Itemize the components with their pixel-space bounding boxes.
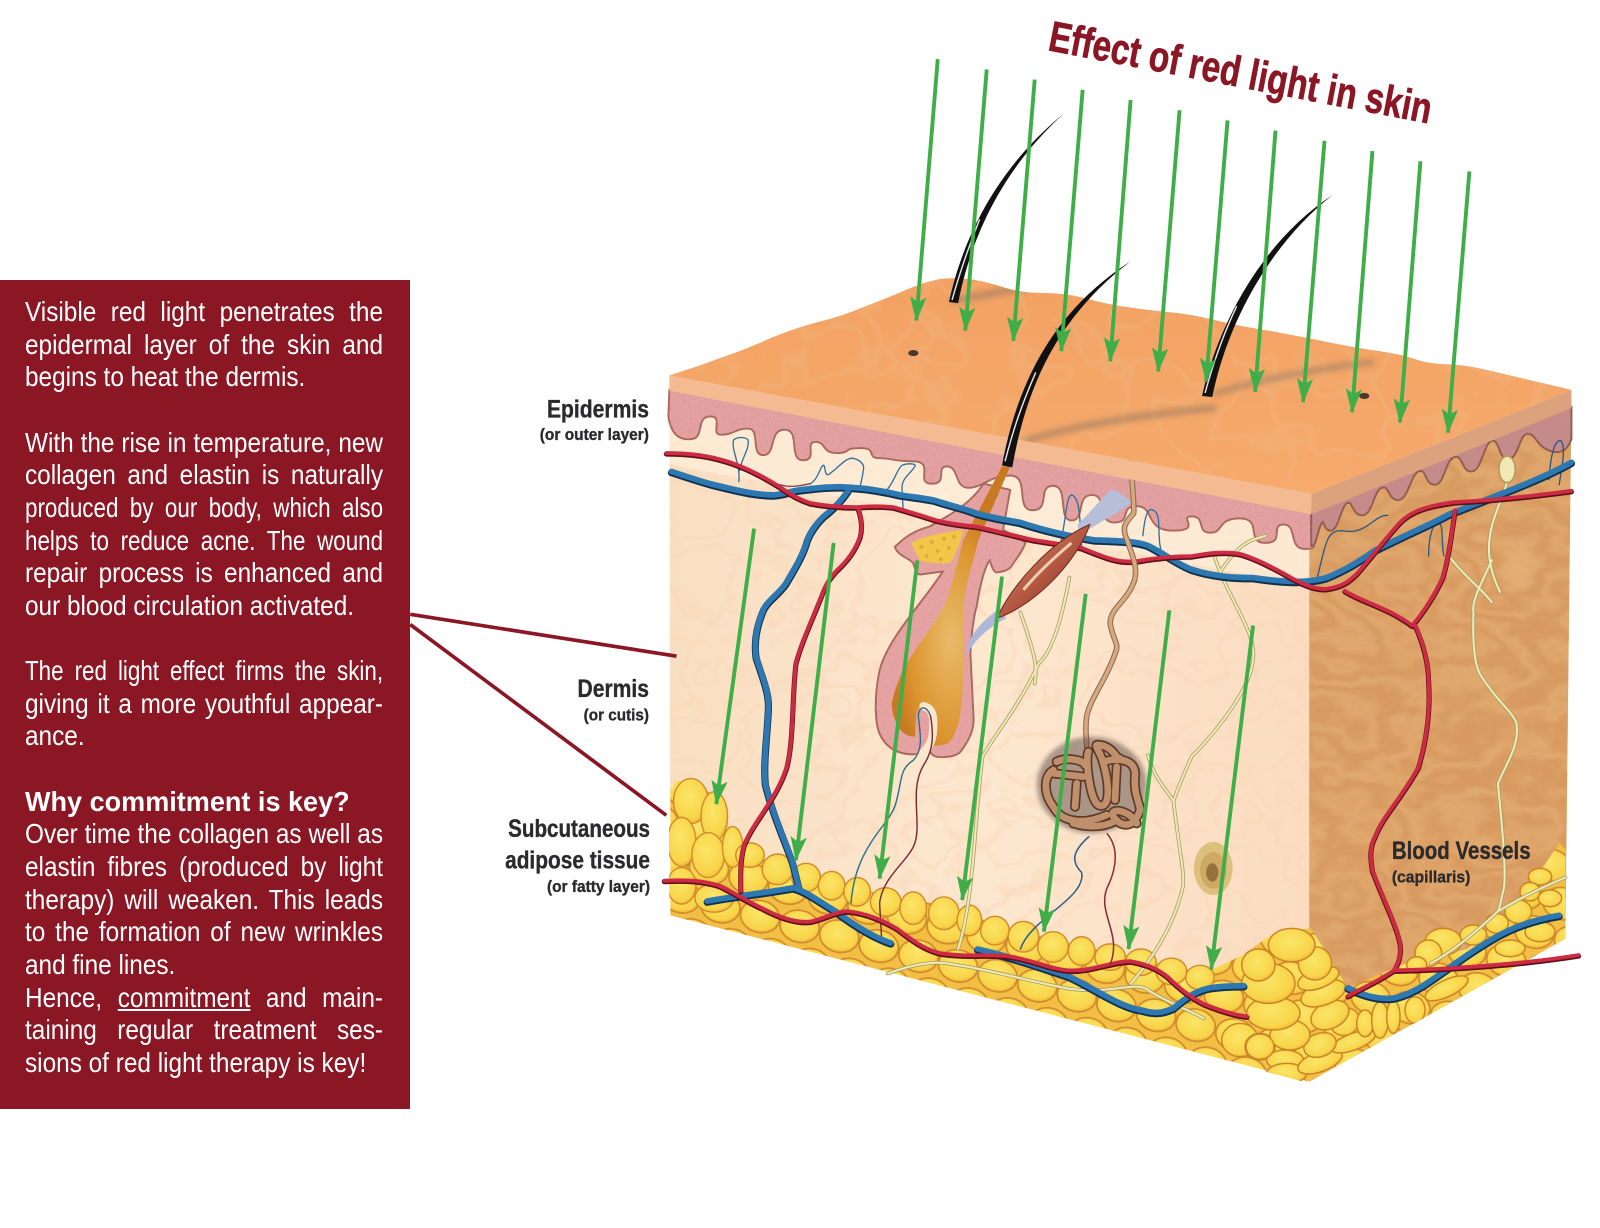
sebaceous gland yellow cells <box>911 530 963 563</box>
fat lobules, corner and right cluster <box>1222 868 1562 1083</box>
panel: red light explanation text: to the formation of new wrinkles <box>24 916 383 947</box>
blue veins <box>671 462 1571 1014</box>
top skin surface <box>663 270 1577 500</box>
green arrows in dermis <box>716 529 1253 969</box>
panel: red light explanation text: Hence, commitment and main- <box>24 982 383 1013</box>
panel: red light explanation text: Why commitment is key? <box>24 786 349 817</box>
panel: red light explanation text: collagen and elastin is naturally <box>24 459 383 490</box>
panel: dermis right face <box>1306 398 1577 1092</box>
hair shadows on skin <box>954 287 1372 441</box>
fat lobules along the upper boundary <box>736 843 1214 990</box>
hair follicle with sebaceous gland <box>851 466 1031 939</box>
fat lobules, left cluster <box>667 779 743 912</box>
capillary loops under the epidermis <box>733 438 1563 582</box>
small corpuscle on right face <box>1499 456 1515 483</box>
leader lines from text panel to skin block <box>410 614 677 815</box>
label: dermis: (or cutis) <box>584 705 649 724</box>
panel: red light explanation text: sions of red light therapy is key! <box>24 1047 366 1078</box>
panel: red light explanation text: giving it a more youthful appear- <box>24 688 383 719</box>
panel: red light explanation text: produced by our body, which also <box>24 492 383 523</box>
panel: red light explanation text: therapy) will weaken. This leads <box>24 884 383 915</box>
hair 1 <box>949 113 1064 303</box>
capillaries below sweat gland <box>1020 834 1115 964</box>
panel: red light explanation text: our blood circulation activated. <box>24 590 354 621</box>
panel: red light explanation text: The red light effect firms the skin, <box>24 655 383 686</box>
label: epidermis: Epidermis <box>547 395 649 423</box>
panel: red light explanation text <box>0 280 410 1109</box>
label: blood vessels: Blood Vessels <box>1392 837 1531 865</box>
panel: red light explanation text: Over time the collagen as well as <box>24 818 383 849</box>
label: dermis: Dermis <box>578 675 649 703</box>
hair 3 <box>1202 195 1333 397</box>
panel: dermis front face <box>663 378 1316 1092</box>
epidermis pink layer with ridges <box>663 383 1577 556</box>
arrector pili muscle <box>966 490 1133 655</box>
label: blood vessels <box>1392 837 1531 887</box>
skin illustration with labels and arrows <box>410 21 1582 1082</box>
panel: red light explanation text: Visible red light penetrates the <box>24 296 383 327</box>
label: subcutaneous adipose tissue <box>505 815 650 896</box>
pacinian corpuscle <box>1194 842 1233 895</box>
panel: red light explanation text: taining regular treatment ses- <box>24 1014 383 1045</box>
panel: red light explanation text: ance. <box>24 720 84 751</box>
hair 2 <box>1002 261 1131 467</box>
label: epidermis: (or outer layer) <box>540 425 649 444</box>
peach stratum band left <box>669 376 1311 514</box>
pale nerve fibres <box>888 482 1565 1018</box>
red arteries <box>664 453 1579 1017</box>
adipose fat layer <box>667 779 1565 1083</box>
label: dermis <box>578 675 649 724</box>
panel: red light explanation text: With the rise in temperature, new <box>24 427 383 458</box>
sweat duct <box>1086 460 1136 747</box>
label: subcutaneous adipose tissue: adipose tissue <box>505 846 650 874</box>
panel: red light explanation text: and fine lines. <box>24 949 175 980</box>
label: subcutaneous adipose tissue: (or fatty layer) <box>547 877 650 896</box>
sweat gland coil <box>1037 737 1147 833</box>
title: Effect of red light in skin <box>1045 13 1436 133</box>
label: blood vessels: (capillaris) <box>1392 868 1470 887</box>
panel: red light explanation text: helps to reduce acne. The wound <box>24 525 383 556</box>
skin pores <box>908 350 1369 399</box>
dermal papilla with nerve and vessel <box>851 706 933 939</box>
label: subcutaneous adipose tissue: Subcutaneous <box>508 815 650 843</box>
panel: red light explanation text: epidermal layer of the skin and <box>24 329 383 360</box>
peach stratum band right <box>1311 390 1571 514</box>
green arrows on surface <box>916 59 1469 433</box>
panel: red light explanation text: begins to heat the dermis. <box>24 361 305 392</box>
panel: red light explanation text: elastin fibres (produced by light <box>24 851 383 882</box>
label: epidermis <box>540 395 649 444</box>
panel: red light explanation text: repair process is enhanced and <box>24 557 383 588</box>
